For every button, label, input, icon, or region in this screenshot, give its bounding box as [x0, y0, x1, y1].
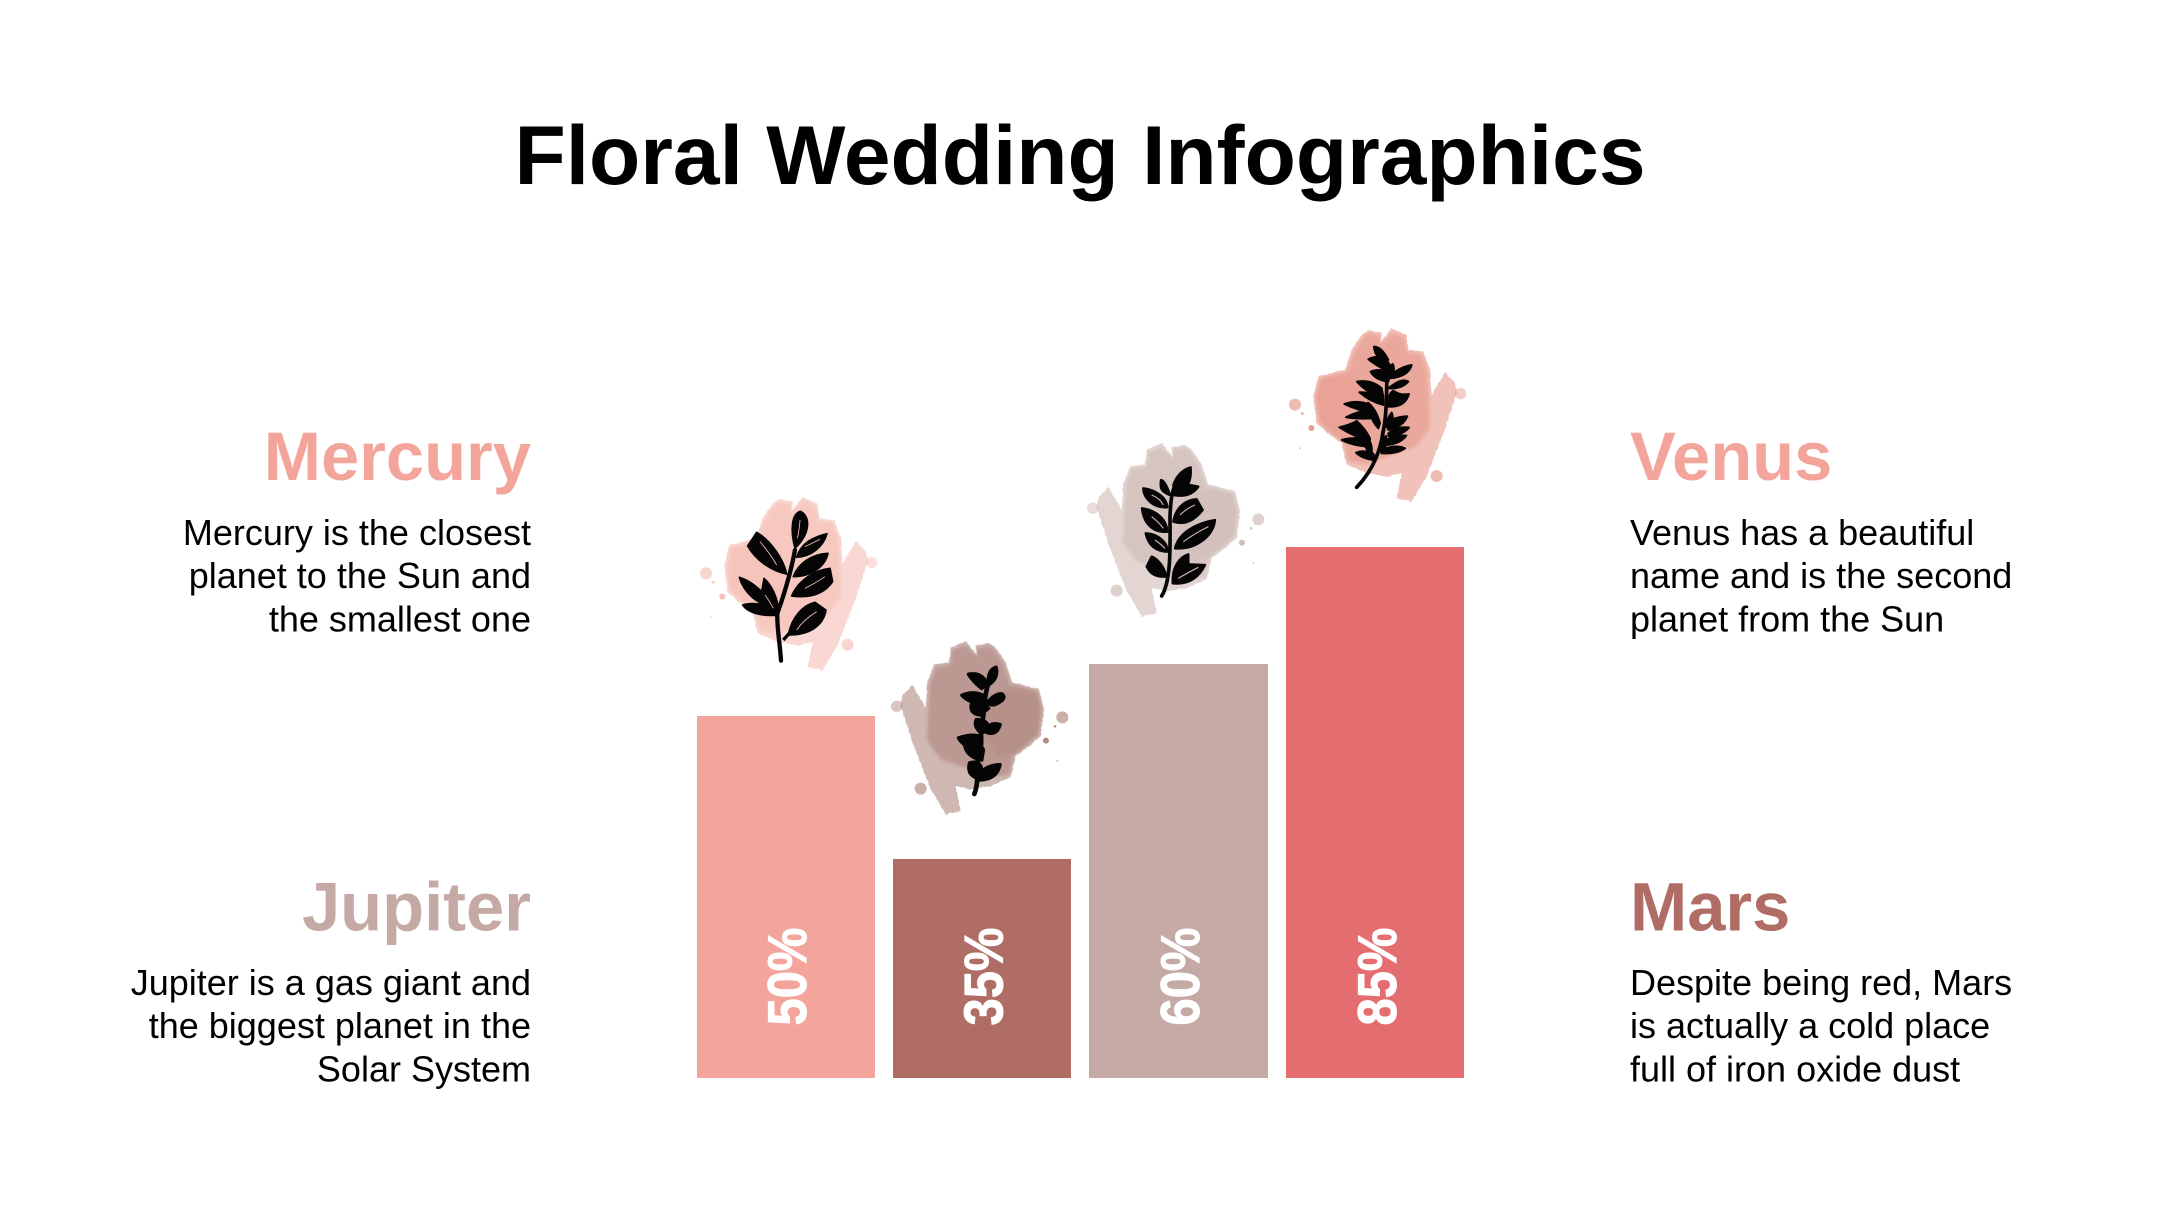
panel: Mercury text [183, 418, 531, 640]
text block: Mars description: Despite being red, Mars [1630, 962, 2012, 1003]
bar: Jupiter 35% [893, 859, 1071, 1078]
text block: Mercury description: planet to the Sun and [189, 555, 531, 596]
heading: Mars: Mars [1630, 868, 1790, 946]
text block: Jupiter description: the biggest planet in the [149, 1005, 531, 1046]
text block: Mercury description: Mercury is the closest [183, 512, 531, 553]
icon: sprig on pink watercolor [700, 497, 877, 670]
text block: Venus description: name and is the second [1630, 555, 2012, 596]
icon: sprig on mauve watercolor [891, 641, 1068, 814]
panel: Venus text [1630, 418, 2012, 640]
text block: Jupiter description: Solar System [317, 1048, 531, 1090]
text block: Venus description: planet from the Sun [1630, 598, 1944, 640]
bar: Mars 85% [1286, 547, 1464, 1078]
text block: Venus description: Venus has a beautiful [1630, 512, 1974, 553]
bar: Venus 60% [1089, 664, 1268, 1078]
bar: Venus 60%: 60% [1150, 928, 1212, 1026]
icon: sprig on coral watercolor [1289, 328, 1466, 502]
heading: Venus: Venus [1630, 418, 1832, 495]
bar: Mercury 50% [697, 716, 875, 1078]
panel: Mars text [1630, 868, 2012, 1090]
title: Floral Wedding Infographics [514, 108, 1646, 202]
text block: Mercury description: the smallest one [269, 598, 531, 640]
text block: Mars description: is actually a cold place [1630, 1005, 1990, 1046]
text block: Jupiter description: Jupiter is a gas giant and [131, 962, 531, 1003]
bar: Mars 85%: 85% [1347, 928, 1409, 1026]
heading: Jupiter: Jupiter [302, 868, 531, 946]
panel: Jupiter text [131, 868, 531, 1090]
bar: Jupiter 35%: 35% [954, 928, 1015, 1026]
heading: Mercury: Mercury [264, 418, 531, 495]
bar: Mercury 50%: 50% [757, 928, 819, 1026]
icon: sprig on dusty rose watercolor [1087, 443, 1264, 616]
text block: Mars description: full of iron oxide dust [1630, 1048, 1960, 1090]
